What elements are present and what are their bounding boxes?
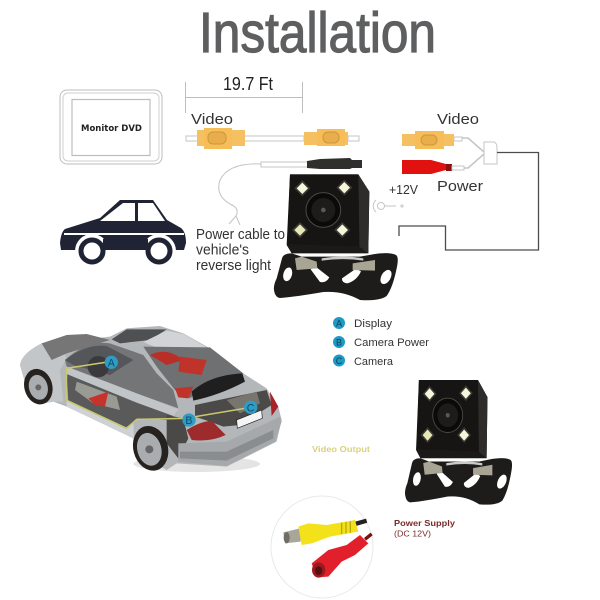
legend item C (333, 354, 394, 368)
legend item A: Display (354, 318, 393, 330)
legend item C: C (336, 356, 343, 366)
icon: monitor DVD (60, 90, 162, 164)
wiring line (399, 152, 538, 250)
cutaway car illustration (20, 326, 282, 475)
marker C (244, 401, 257, 414)
video and power connectors (402, 131, 497, 174)
legend item A (333, 317, 393, 330)
legend item B: Camera Power (354, 337, 429, 349)
camera: top diagram (274, 174, 398, 300)
legend item C: Camera (354, 356, 394, 368)
label: video output: Video Output (312, 445, 370, 454)
marker C: C (247, 402, 255, 414)
label: power cable to reverse light: reverse light (196, 258, 271, 274)
label: power cable to reverse light: vehicle's (196, 242, 249, 258)
marker A (105, 356, 118, 369)
label: power: Power (437, 178, 483, 195)
label: power cable to reverse light: Power cable to (196, 227, 285, 243)
marker A: A (108, 357, 116, 369)
icon: car silhouette (60, 200, 186, 268)
legend (333, 317, 429, 368)
cable length dimension: 19.7 Ft (223, 74, 273, 94)
video cable with RCA plugs (186, 128, 359, 149)
label: power supply: Power Supply (394, 518, 455, 528)
label: video right: Video (437, 111, 479, 128)
legend item A: A (336, 318, 342, 328)
camera: lower product photo (405, 380, 512, 505)
legend item B: B (336, 338, 342, 348)
icon: monitor DVD: Monitor DVD (81, 124, 142, 134)
cable length dimension (186, 74, 302, 113)
label: power supply (394, 518, 455, 538)
label: +12V: +12V (389, 183, 419, 197)
RCA connector photo circle (271, 496, 373, 598)
symbol: power terminal (373, 200, 404, 212)
label: video left: Video (191, 111, 233, 128)
marker B (182, 413, 196, 427)
marker B: B (185, 415, 193, 427)
power cable and connector (219, 158, 362, 225)
label: power supply: (DC 12V) (394, 530, 431, 538)
title: Installation (199, 1, 436, 65)
